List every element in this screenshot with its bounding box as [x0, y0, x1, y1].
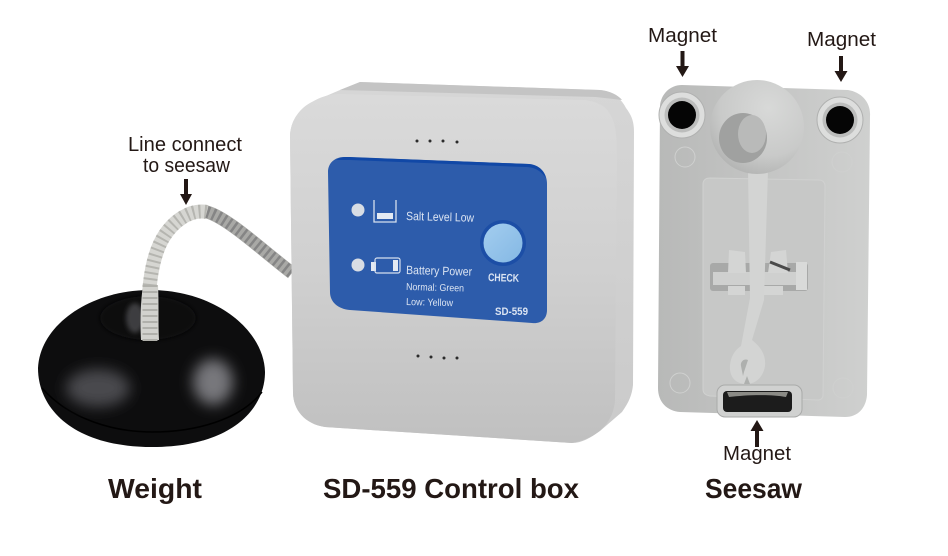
label: top right magnet: Magnet — [807, 29, 876, 51]
label: top left magnet: Magnet — [648, 25, 717, 47]
arrow: bottom magnet — [750, 420, 764, 447]
seesaw — [658, 80, 870, 417]
check button: CHECK — [488, 272, 519, 285]
left magnet hole — [659, 92, 705, 138]
battery indicator — [352, 258, 472, 309]
salt level indicator — [352, 200, 475, 225]
inner plate — [703, 178, 825, 400]
heading: seesaw: Seesaw — [705, 473, 802, 504]
vent dots top — [416, 140, 458, 144]
battery indicator: Normal: Green — [406, 282, 464, 295]
control box — [290, 82, 634, 443]
clip bar — [710, 250, 808, 295]
arrow: to rope — [180, 179, 192, 205]
heading: weight: Weight — [108, 473, 202, 504]
bottom magnet — [717, 385, 802, 417]
arrow: top right magnet — [834, 56, 848, 82]
arrow: top left magnet — [676, 51, 689, 77]
battery indicator: Low: Yellow — [406, 297, 454, 309]
label: bottom magnet: Magnet — [723, 443, 791, 465]
salt level indicator: Salt Level Low — [406, 209, 475, 225]
label: line connect to seesaw — [128, 134, 242, 177]
label: line connect to seesaw: to seesaw — [143, 155, 231, 177]
heading: control box: SD-559 Control box — [323, 473, 579, 504]
rope line — [148, 212, 292, 340]
ball socket — [710, 80, 804, 174]
battery indicator: Battery Power — [406, 263, 472, 279]
right magnet hole — [817, 97, 863, 143]
check button — [480, 220, 526, 285]
weight — [38, 285, 265, 447]
vent dots bottom — [416, 354, 458, 360]
hinge arm — [730, 170, 768, 384]
label: line connect to seesaw: Line connect — [128, 134, 242, 156]
model number: SD-559 — [495, 306, 528, 318]
blue label panel — [328, 157, 547, 323]
